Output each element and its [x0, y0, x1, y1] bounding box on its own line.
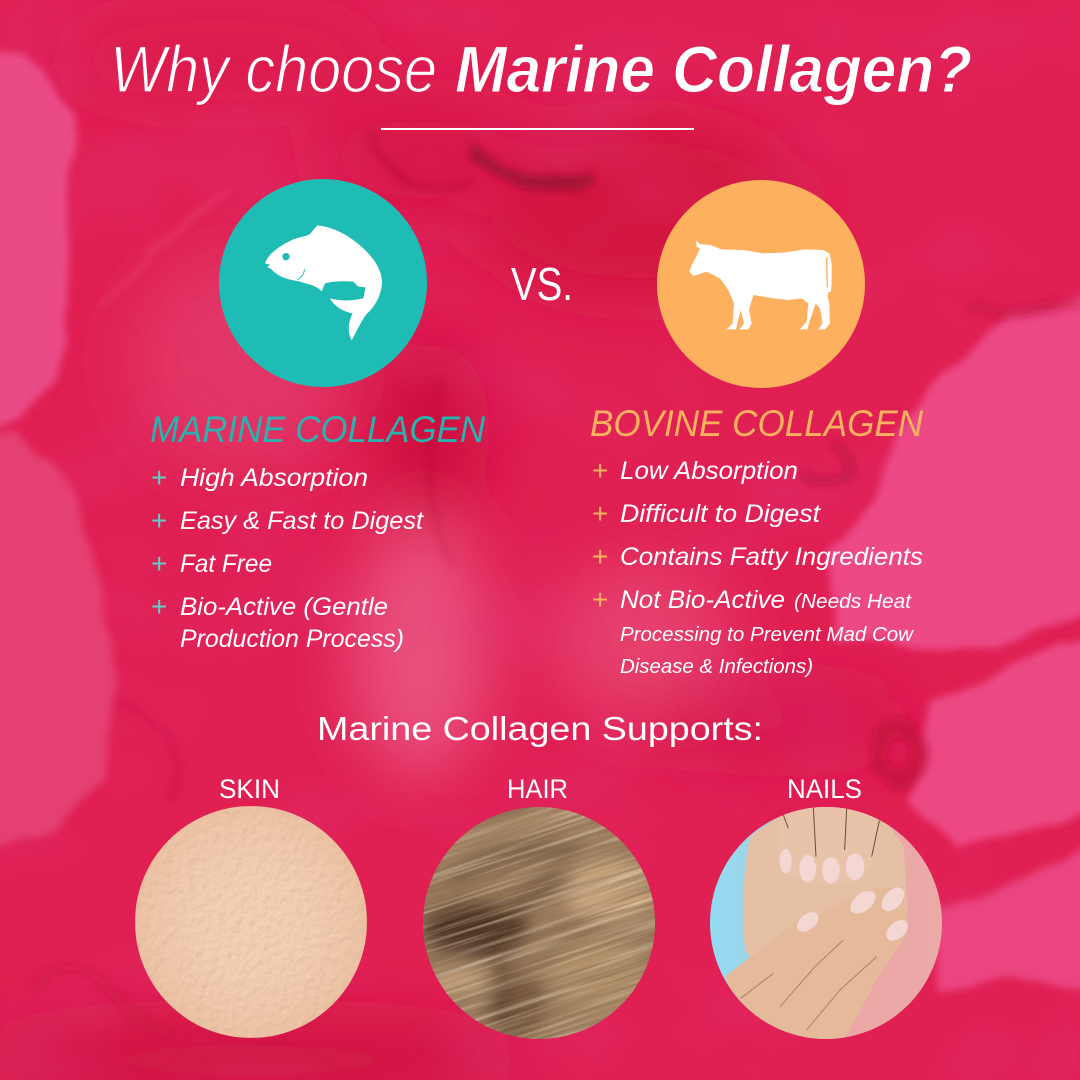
heading: marine collagen supports: Marine Collagen Supports:	[317, 710, 763, 747]
list: bovine drawbacks: Processing to Prevent Mad Cow	[620, 624, 915, 646]
panel: bovine collagen	[590, 180, 923, 678]
label: skin: SKIN	[219, 774, 280, 804]
list: bovine drawbacks: Contains Fatty Ingredients	[620, 543, 923, 571]
list: bovine drawbacks: (Needs Heat	[794, 591, 912, 613]
heading: marine collagen: MARINE COLLAGEN	[150, 409, 485, 450]
title: Why choose	[110, 32, 437, 106]
list: marine benefits: +	[151, 505, 167, 536]
photo: skin texture	[135, 806, 367, 1038]
photo: hands with painted nails	[710, 803, 942, 1043]
panel: marine collagen	[150, 179, 485, 653]
panel: hair	[350, 731, 728, 1080]
photo: hair strands	[423, 807, 655, 1039]
label: hair: HAIR	[507, 774, 568, 804]
list: bovine drawbacks: Not Bio-Active	[620, 586, 785, 614]
list: marine benefits: Fat Free	[180, 550, 272, 578]
title: Marine Collagen?	[455, 32, 972, 106]
list: marine benefits	[151, 462, 424, 653]
icon: fish in teal circle	[219, 179, 427, 387]
list: bovine drawbacks: +	[592, 455, 608, 486]
list: marine benefits: Bio-Active (Gentle	[180, 593, 388, 621]
icon: cow in orange circle	[657, 180, 865, 388]
list: marine benefits: +	[151, 591, 167, 622]
list: bovine drawbacks: Difficult to Digest	[620, 500, 821, 528]
list: bovine drawbacks: +	[592, 498, 608, 529]
title	[110, 32, 972, 106]
vs label: VS.	[511, 258, 573, 310]
list: marine benefits: Easy & Fast to Digest	[180, 507, 424, 535]
list: marine benefits: High Absorption	[180, 464, 368, 492]
list: bovine drawbacks	[592, 455, 923, 678]
list: bovine drawbacks: +	[592, 541, 608, 572]
heading: bovine collagen: BOVINE COLLAGEN	[590, 403, 923, 444]
list: bovine drawbacks: Disease & Infections)	[620, 656, 813, 678]
list: bovine drawbacks: +	[592, 584, 608, 615]
list: marine benefits: Production Process)	[180, 625, 404, 653]
title underline	[381, 128, 694, 130]
list: marine benefits: +	[151, 548, 167, 579]
list: marine benefits: +	[151, 462, 167, 493]
label: nails: NAILS	[787, 774, 862, 804]
list: bovine drawbacks: Low Absorption	[620, 457, 798, 485]
panel: nails	[710, 774, 942, 1043]
panel: skin	[135, 774, 367, 1038]
